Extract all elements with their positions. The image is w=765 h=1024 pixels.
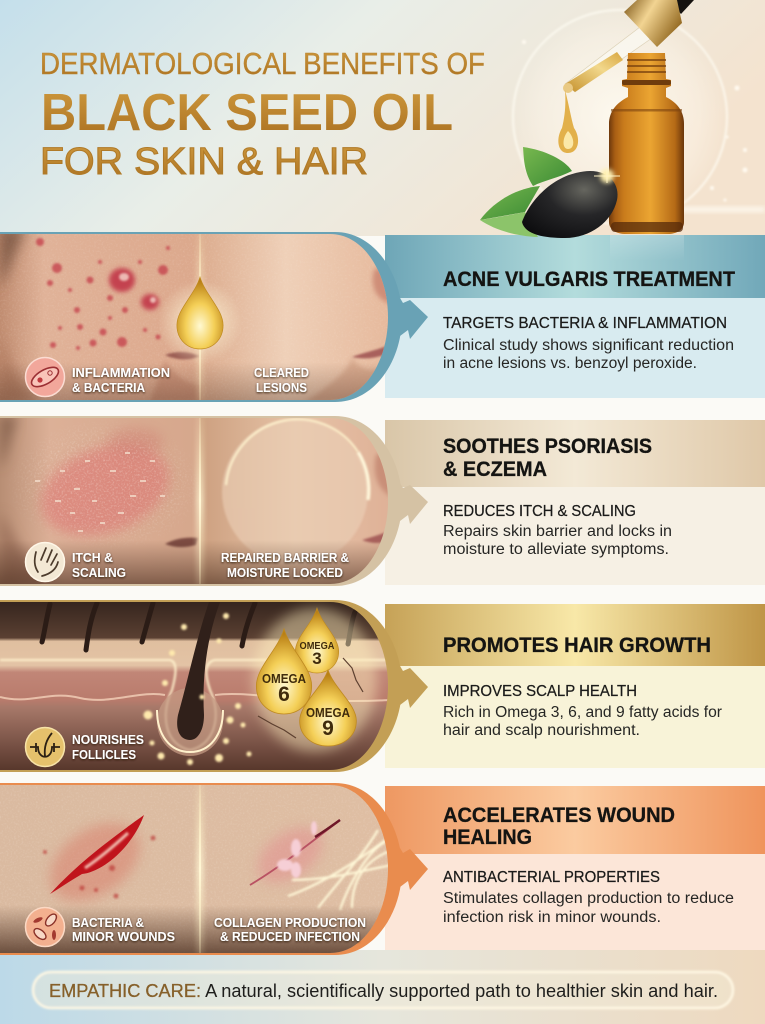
text block: in acne lesions vs. benzoyl peroxide. [443, 355, 697, 372]
glow ring [513, 10, 727, 224]
text block: infection risk in minor wounds. [443, 909, 661, 926]
section 4: wound healing [0, 783, 765, 955]
header background [0, 0, 765, 236]
title: BLACK SEED OIL [41, 84, 453, 142]
label: bacteria and minor wounds: MINOR WOUNDS [72, 929, 175, 944]
icon: follicle [26, 728, 64, 766]
drop: omega 9: OMEGA [306, 706, 350, 720]
drop: omega 9 [300, 670, 356, 746]
label: bacteria and minor wounds [72, 915, 175, 944]
body band [385, 487, 765, 585]
text block [443, 503, 672, 558]
drop: omega 6: 6 [278, 683, 290, 706]
panel frame [0, 783, 402, 955]
label: cleared lesions: LESIONS [256, 380, 307, 395]
label: collagen production and reduced infection: & REDUCED INFECTION [220, 929, 360, 944]
header band [385, 604, 765, 666]
label: repaired barrier and moisture locked: REPAIRED BARRIER & [221, 550, 349, 565]
before and after image [0, 416, 392, 586]
icon: itching hand [26, 542, 64, 582]
footer background [0, 950, 765, 1024]
heading: ACNE VULGARIS TREATMENT [443, 268, 735, 291]
arrow [400, 848, 428, 890]
label: cleared lesions [254, 365, 309, 395]
label: nourishes follicles: FOLLICLES [72, 747, 136, 762]
text block: REDUCES ITCH & SCALING [443, 503, 636, 520]
footer text: EMPATHIC CARE: A natural, scientifically supported path to healthier skin and hair. [49, 980, 718, 1001]
seed sparkle [594, 169, 620, 183]
text block: Repairs skin barrier and locks in [443, 523, 672, 540]
heading [443, 804, 675, 849]
label: itch and scaling: SCALING [72, 565, 126, 580]
label: collagen production and reduced infection: COLLAGEN PRODUCTION [214, 915, 366, 930]
drop: omega 9: 9 [322, 717, 334, 740]
heading: ACCELERATES WOUND [443, 804, 675, 827]
drop: omega 6: OMEGA [262, 672, 306, 686]
text block [443, 315, 734, 372]
label: inflammation and bacteria: & BACTERIA [72, 380, 146, 395]
body band [385, 298, 765, 398]
text block: Stimulates collagen production to reduce [443, 890, 734, 907]
drop: omega 3: OMEGA [300, 640, 335, 652]
text block: Rich in Omega 3, 6, and 9 fatty acids for [443, 704, 722, 721]
label: inflammation and bacteria: INFLAMMATION [72, 365, 170, 380]
body band [385, 666, 765, 768]
panel frame [0, 416, 402, 586]
shelf highlight [680, 207, 765, 212]
title [40, 46, 485, 183]
heading: HEALING [443, 826, 532, 849]
sparkles [522, 40, 748, 202]
header band [385, 786, 765, 854]
panel frame [0, 600, 402, 772]
text block: moisture to alleviate symptoms. [443, 541, 669, 558]
icon: bacteria cluster [26, 908, 64, 946]
pill [33, 972, 733, 1008]
title: DERMATOLOGICAL BENEFITS OF [40, 46, 485, 81]
footer callout [33, 972, 733, 1008]
black seed [522, 171, 618, 238]
dropper [558, 0, 694, 153]
heading [443, 435, 652, 481]
oil drop [158, 277, 242, 364]
icon: bacteria [26, 358, 64, 396]
scalp cross section [0, 600, 390, 772]
label: inflammation and bacteria [72, 365, 170, 395]
drop: omega 3: 3 [312, 649, 322, 668]
text block: TARGETS BACTERIA & INFLAMMATION [443, 315, 727, 332]
label: itch and scaling [72, 550, 126, 580]
text block [443, 683, 722, 739]
drop: omega 3 [295, 608, 339, 673]
arrow [400, 298, 428, 339]
label: collagen production and reduced infection [214, 915, 366, 944]
before and after image [0, 783, 392, 955]
arrow [400, 483, 428, 524]
label: itch and scaling: ITCH & [72, 550, 113, 565]
label: nourishes follicles [72, 732, 144, 762]
text block: hair and scalp nourishment. [443, 722, 640, 739]
bottle [609, 53, 684, 234]
heading: & ECZEMA [443, 458, 547, 481]
heading: PROMOTES HAIR GROWTH [443, 634, 711, 657]
omega drops [253, 608, 377, 752]
molecule chains [258, 658, 363, 738]
section 3: hair growth [0, 600, 765, 772]
text block [443, 869, 734, 926]
label: repaired barrier and moisture locked [221, 550, 349, 580]
label: repaired barrier and moisture locked: MOISTURE LOCKED [227, 565, 343, 580]
bottle reflection [610, 235, 684, 261]
text block: Clinical study shows significant reduction [443, 337, 734, 354]
label: cleared lesions: CLEARED [254, 365, 309, 380]
illustration: oil bottle, dropper and black seed [480, 0, 765, 261]
header band [385, 235, 765, 298]
title: FOR SKIN & HAIR [40, 141, 368, 183]
section 2: psoriasis and eczema [0, 416, 765, 586]
leaves [480, 147, 572, 237]
before and after image [0, 228, 392, 402]
label: bacteria and minor wounds: BACTERIA & [72, 915, 144, 930]
text block: IMPROVES SCALP HEALTH [443, 683, 637, 700]
arrow [400, 666, 428, 708]
heading: SOOTHES PSORIASIS [443, 435, 652, 458]
drop: omega 6 [256, 629, 312, 714]
label: nourishes follicles: NOURISHES [72, 732, 144, 747]
section 1: acne vulgaris [0, 228, 765, 402]
text block: ANTIBACTERIAL PROPERTIES [443, 869, 660, 886]
panel frame [0, 232, 402, 402]
body band [385, 854, 765, 950]
header band [385, 420, 765, 487]
